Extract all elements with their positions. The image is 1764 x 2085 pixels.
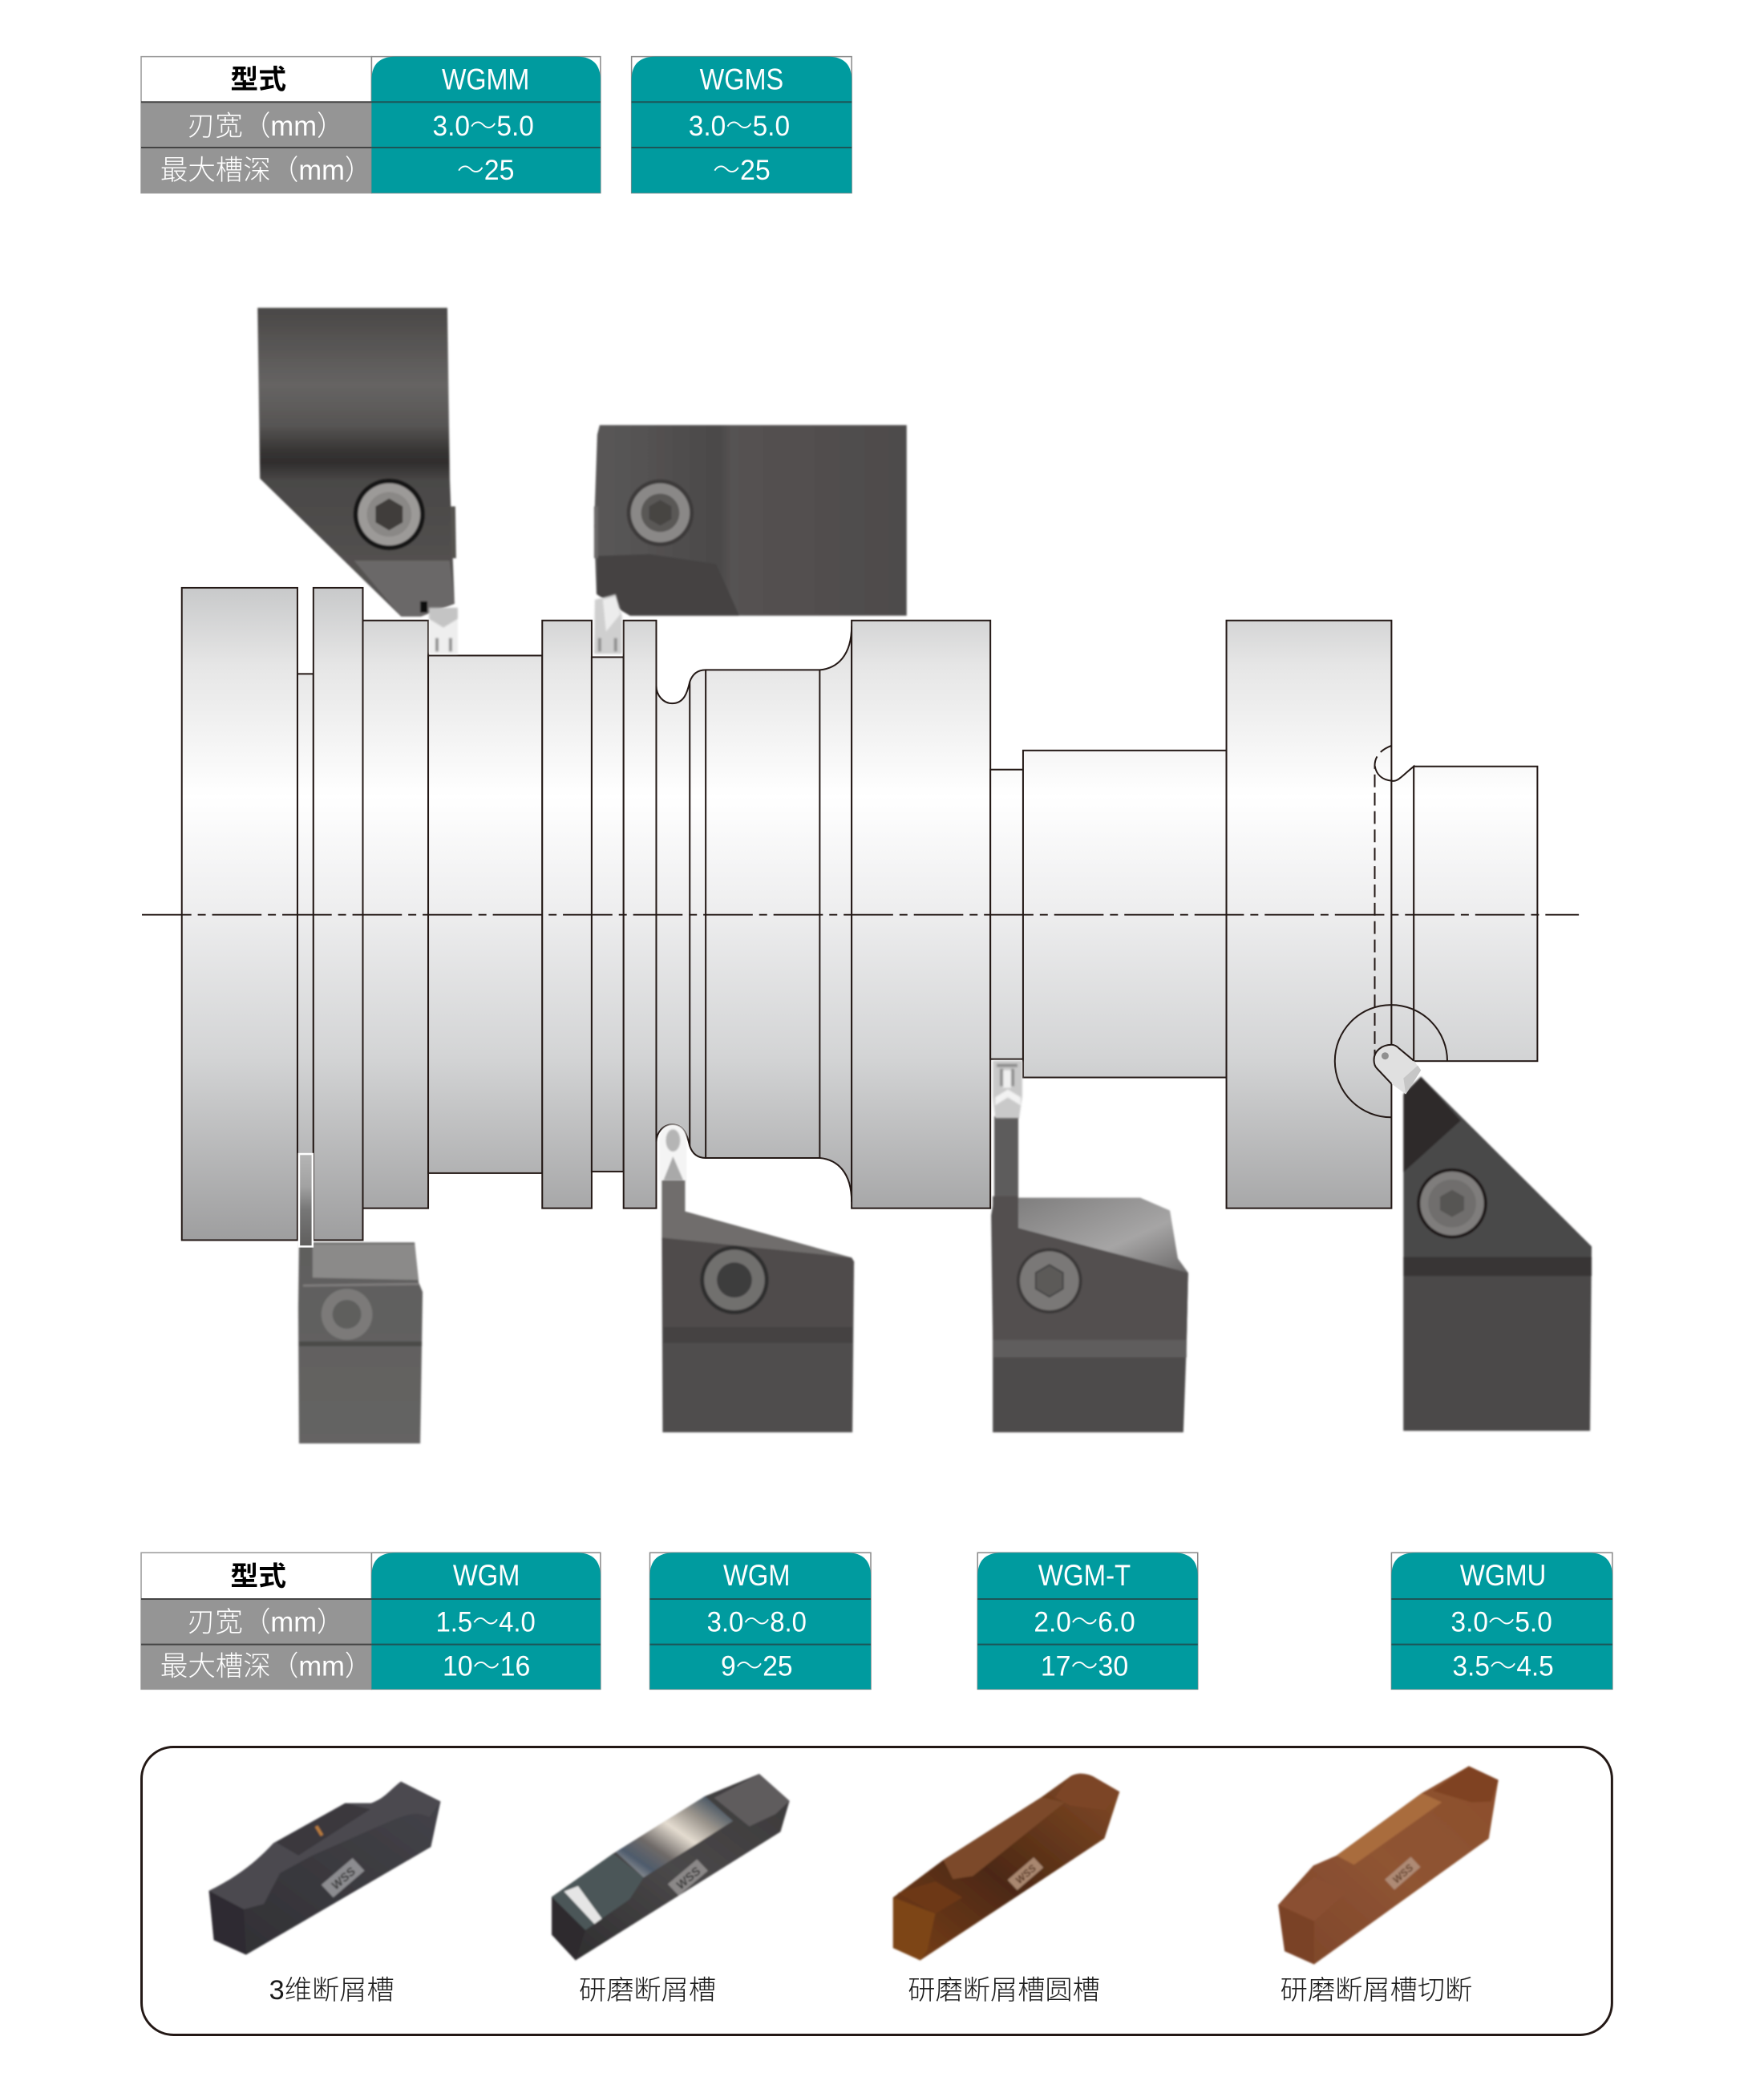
insert 3: ground round groove (893, 1774, 1119, 1960)
spec table: WGMU: 3.0～5.0 (1450, 1607, 1552, 1638)
spec table: WGM small: 1.5～4.0 (435, 1607, 536, 1638)
spec table: WGMM: 型式 (230, 64, 286, 95)
spec table: WGM small (141, 1553, 601, 1689)
insert tip 2 (594, 594, 622, 654)
tool 4: groove holder (662, 1180, 854, 1432)
spec table: WGM small: 最大槽深（mm） (160, 1650, 372, 1682)
logo (668, 1860, 708, 1896)
spec table: WGM small: 10～16 (443, 1650, 530, 1682)
screw (322, 1289, 372, 1340)
spec table: WGMU: 3.5～4.5 (1452, 1650, 1554, 1682)
logo: WSS (1013, 1862, 1039, 1886)
spec table: WGMM: 最大槽深（mm） (160, 155, 372, 186)
spec table: WGMS (632, 57, 852, 193)
spec table: WGMS: WGMS (700, 63, 783, 95)
screw (1417, 1168, 1487, 1238)
spec table: WGMS: 3.0～5.0 (689, 111, 790, 142)
centre line (142, 914, 1579, 916)
spec table: WGMU: WGMU (1460, 1559, 1546, 1592)
spec table: WGM-T (977, 1553, 1198, 1689)
spec table: WGM-T: 17～30 (1041, 1650, 1128, 1682)
spec table: WGMS: ～25 (713, 155, 771, 186)
spec table: WGM small: 型式 (230, 1561, 286, 1592)
logo (322, 1858, 365, 1897)
insert tip 1 (429, 608, 458, 654)
spec table: WGMM (141, 57, 601, 193)
spec table: WGM small: WGM (453, 1559, 520, 1592)
spec table: WGM: 9～25 (721, 1650, 793, 1682)
tool 2: top-centre holder (594, 425, 907, 616)
spec table: WGM: WGM (723, 1559, 791, 1592)
logo: WSS (330, 1865, 358, 1893)
spec table: WGMM: ～25 (457, 155, 514, 186)
spec table: WGM: 3.0～8.0 (707, 1607, 807, 1638)
insert 2: ground chipbreaker (552, 1774, 790, 1960)
label: 3维断屑槽 (269, 1975, 394, 2006)
hidden groove: dashed outline (1375, 746, 1391, 1059)
label: 研磨断屑槽 (579, 1975, 716, 2006)
label: 研磨断屑槽切断 (1281, 1975, 1472, 2006)
insert 1: 3D chipbreaker (209, 1782, 440, 1955)
spec table: WGMM: 3.0～5.0 (433, 111, 534, 142)
insert tip 4 (659, 1124, 686, 1180)
detail circle (1335, 1005, 1447, 1117)
label: 研磨断屑槽圆槽 (908, 1975, 1100, 2006)
spec table: WGM-T: 2.0～6.0 (1034, 1607, 1135, 1638)
logo (1008, 1857, 1043, 1890)
insert 4: ground cut-off (1278, 1766, 1499, 1964)
screw (354, 479, 425, 550)
insert tip 5 (993, 1061, 1022, 1118)
tool 3: bottom-left holder (298, 1242, 423, 1443)
spec table: WGMU (1391, 1553, 1612, 1689)
logo: WSS (1390, 1861, 1416, 1885)
blade of tool 3 (299, 1154, 313, 1246)
logo: WSS (674, 1865, 704, 1892)
tool 1: top-left holder (257, 308, 456, 617)
tool 6: WGMU holder (1403, 1077, 1592, 1431)
logo (1385, 1856, 1421, 1890)
workpiece shaft (182, 588, 1537, 1240)
spec table: WGMM: 刃宽（mm） (188, 111, 345, 142)
spec table: WGM small: 刃宽（mm） (188, 1607, 345, 1638)
screw (627, 480, 694, 546)
screw (700, 1245, 769, 1314)
panel: insert types (142, 1747, 1612, 2034)
insert tip 6 with groove outline (1374, 1045, 1421, 1094)
spec table: WGMM: WGMM (442, 63, 529, 95)
tool 5: WGM-T holder (991, 1116, 1188, 1432)
spec table: WGM-T: WGM-T (1038, 1559, 1131, 1592)
screw (1017, 1248, 1082, 1314)
spec table: WGM (650, 1553, 871, 1689)
